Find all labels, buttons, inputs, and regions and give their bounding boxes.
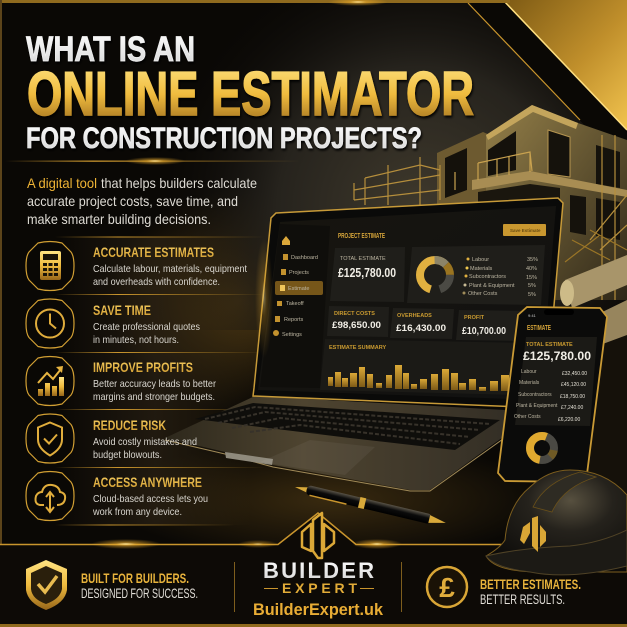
text: accurate estimates: and overheads with confidence.: [93, 276, 220, 288]
card: overheads: £16,430.00: [396, 323, 446, 334]
title: FOR CONSTRUCTION PROJECTS?: [26, 122, 422, 155]
pen: [294, 482, 447, 528]
phone donut chart: [530, 436, 554, 460]
card: direct costs: [327, 306, 389, 337]
laptop: [165, 198, 563, 491]
icon: cloud upload: [26, 472, 74, 520]
intro text: make smarter building decisions.: [27, 211, 211, 227]
icon: rising chart: [26, 356, 74, 406]
text: save time: [93, 302, 200, 346]
phone summary card: Other Costs: [514, 414, 541, 420]
text: reduce risk: budget blowouts.: [93, 449, 162, 461]
phone summary card: £6,220.00: [558, 417, 580, 423]
card: direct costs: £98,650.00: [332, 320, 381, 331]
blueprint rolls: [560, 230, 627, 345]
donut legend: [462, 257, 538, 298]
card: total estimate: [330, 247, 405, 302]
scaffolding: [354, 135, 627, 300]
card: cost breakdown donut: [407, 245, 545, 305]
logo: Builder Expert: BUILDER: [263, 558, 374, 583]
bar chart: estimate summary: [320, 339, 530, 395]
hard hat logo: [520, 516, 546, 552]
phone summary card: £18,750.00: [560, 394, 585, 400]
card: profit: [456, 310, 530, 341]
footer: built for builders: DESIGNED FOR SUCCESS.: [81, 585, 198, 601]
footer panel: [0, 513, 627, 627]
text: save time: SAVE TIME: [93, 302, 151, 318]
building illustration: [354, 105, 627, 300]
sidebar: [260, 224, 330, 388]
screen heading and button: Save Estimate: [510, 228, 541, 233]
donut legend: Other Costs: [468, 291, 498, 297]
screen heading and button: PROJECT ESTIMATE: [338, 233, 385, 240]
text: improve profits: [93, 359, 216, 403]
text: reduce risk: Avoid costly mistakes and: [93, 436, 197, 448]
sidebar: Settings: [282, 332, 302, 338]
laptop base: [165, 396, 510, 491]
phone heading: ESTIMATE: [527, 323, 551, 332]
donut chart: [420, 260, 450, 290]
panel: benefits list: [26, 242, 247, 520]
footer: shield badge: [26, 560, 67, 610]
card: direct costs: DIRECT COSTS: [334, 311, 375, 317]
donut legend: 15%: [526, 275, 537, 281]
title: [26, 30, 474, 155]
left volume: [437, 132, 490, 215]
phone summary card: £125,780.00: [523, 349, 591, 363]
text: access anywhere: work from any device.: [92, 506, 182, 518]
phone summary card: Subcontractors: [518, 392, 552, 398]
phone summary card: Materials: [519, 380, 540, 386]
title divider: [5, 157, 300, 165]
text: reduce risk: REDUCE RISK: [93, 417, 166, 433]
balcony rail: [455, 152, 532, 190]
donut legend: 35%: [527, 257, 538, 263]
text: access anywhere: ACCESS ANYWHERE: [93, 474, 202, 490]
footer: built for builders: BUILT FOR BUILDERS.: [81, 570, 189, 586]
title: WHAT IS AN: [26, 30, 195, 69]
text: improve profits: margins and stronger budgets.: [93, 391, 215, 403]
phone summary card: Labour: [521, 369, 537, 375]
icon: shield check: [26, 414, 74, 463]
donut legend: 5%: [528, 283, 536, 289]
donut legend: Labour: [472, 257, 489, 263]
hard hat: [486, 470, 627, 575]
text: reduce risk: [93, 417, 197, 461]
title: ONLINE ESTIMATOR: [27, 60, 474, 129]
text: improve profits: Better accuracy leads to better: [93, 378, 216, 390]
footer: better estimates: BETTER ESTIMATES.: [480, 576, 581, 592]
logo: Builder Expert: [253, 513, 384, 619]
text: accurate estimates: [93, 244, 247, 288]
donut legend: 40%: [526, 266, 537, 272]
intro text: A digital tool: [27, 175, 97, 191]
laptop screen: [258, 206, 556, 400]
donut legend: Subcontractors: [469, 274, 506, 280]
wall and gold roof shape top right: [160, 0, 627, 330]
footer: pound coin: [427, 567, 467, 607]
logo: Builder Expert: EXPERT: [282, 580, 357, 596]
main upper block: [486, 105, 627, 300]
phone summary card: £32,450.00: [562, 371, 587, 377]
footer: better estimates: [480, 576, 581, 607]
footer: better estimates: BETTER RESULTS.: [480, 591, 565, 607]
list row backgrounds: [55, 236, 265, 526]
glow on laptop left edge: [255, 238, 273, 358]
text: access anywhere: [92, 474, 208, 518]
card: total estimate: TOTAL ESTIMATE: [340, 256, 386, 262]
bar chart: estimate summary: ESTIMATE SUMMARY: [329, 345, 386, 351]
phone summary card: Plant & Equipment: [516, 403, 558, 409]
text: save time: Create professional quotes: [93, 321, 200, 333]
card: profit: PROFIT: [464, 315, 485, 321]
text: save time: in minutes, not hours.: [93, 334, 179, 346]
donut legend: Plant & Equipment: [469, 283, 515, 289]
intro text: that helps builders calculate: [101, 175, 257, 191]
sidebar: Estimate: [288, 286, 309, 292]
phone summary card: £45,120.00: [561, 382, 586, 388]
text: accurate estimates: Calculate labour, materials, equipment: [93, 263, 247, 275]
card: total estimate: £125,780.00: [338, 265, 396, 280]
phone notch: [544, 309, 574, 315]
text: accurate estimates: ACCURATE ESTIMATES: [93, 244, 214, 260]
phone summary card: TOTAL ESTIMATE: [526, 342, 573, 348]
sidebar: Projects: [289, 270, 309, 276]
icon: calculator: [26, 242, 74, 290]
intro text: accurate project costs, save time, and: [27, 193, 238, 209]
sidebar: Takeoff: [286, 301, 304, 307]
text: improve profits: IMPROVE PROFITS: [93, 359, 193, 375]
logo: Builder Expert: BuilderExpert.uk: [253, 600, 384, 619]
phone summary card: [514, 337, 597, 426]
donut legend: Materials: [470, 266, 493, 272]
screen heading and button: [338, 224, 546, 240]
card: overheads: OVERHEADS: [397, 313, 432, 319]
icon: clock: [26, 299, 74, 348]
sidebar: Reports: [284, 317, 304, 323]
footer: built for builders: [81, 570, 198, 601]
card: overheads: [390, 308, 454, 339]
text: access anywhere: Cloud-based access lets you: [93, 493, 208, 505]
footer: pound coin: £: [439, 572, 455, 603]
phone: 9:41: [528, 313, 537, 318]
logo mark: [302, 513, 334, 558]
donut legend: 5%: [528, 292, 536, 298]
phone summary card: £7,240.00: [561, 405, 583, 411]
intro text: [27, 175, 257, 227]
laptop lid: [253, 198, 563, 408]
card: profit: £10,700.00: [462, 326, 506, 337]
sidebar: Dashboard: [291, 255, 318, 261]
phone: [498, 307, 607, 482]
